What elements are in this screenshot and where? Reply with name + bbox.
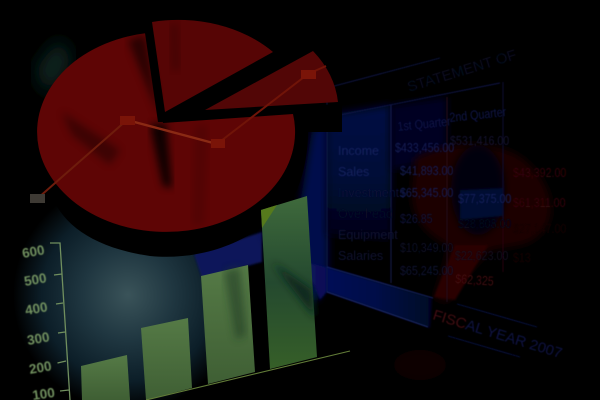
- row labels: [338, 144, 405, 263]
- red stripe: [434, 245, 488, 300]
- line markers: [30, 194, 45, 203]
- figures column 3: [513, 165, 567, 265]
- y axis: [50, 243, 70, 400]
- figures column 1: $41,893.00: [400, 163, 454, 178]
- bar 100: [81, 355, 130, 400]
- pie shadow: [50, 104, 342, 257]
- bar chart: [21, 196, 350, 400]
- red figure: [412, 145, 551, 302]
- row labels: Salaries: [338, 249, 383, 263]
- figures column 1: $26.85: [400, 211, 433, 226]
- quarter headers: 2nd Quarter: [449, 104, 507, 125]
- navy patch behind figure: [460, 188, 503, 220]
- pie chart: [30, 20, 342, 257]
- right slice: [205, 51, 338, 110]
- y axis labels: 400: [24, 299, 49, 318]
- line chart overlay: [30, 66, 326, 203]
- quarter headers: [397, 104, 507, 134]
- row labels: Sales: [338, 165, 369, 179]
- figures column 1: $433,456.00: [395, 140, 455, 155]
- row labels: Investments: [338, 186, 405, 200]
- row labels: Income: [338, 144, 379, 158]
- figures column 2: $531,416.00: [450, 133, 510, 148]
- dark hole in red figure: [451, 145, 505, 235]
- table navy cells: [391, 97, 447, 170]
- figures column 3: $61,311.00: [513, 195, 566, 210]
- figures column 1: $10,349.00: [400, 240, 454, 255]
- baseline: [146, 351, 350, 400]
- table title: STATEMENT OF: [405, 46, 519, 96]
- row labels: Overhead: [338, 207, 393, 221]
- blue backdrop: [194, 120, 328, 300]
- y axis labels: 300: [26, 329, 51, 348]
- teal streak top left: [35, 38, 72, 95]
- bar 400: [261, 196, 317, 369]
- y axis labels: 600: [21, 242, 46, 261]
- table lines: [327, 58, 537, 357]
- quarter headers: 1st Quarter: [397, 113, 451, 134]
- figures column 2: [450, 133, 512, 289]
- figures column 1: $65,345.00: [400, 185, 454, 200]
- figures column 3: $27,147.00: [513, 221, 567, 236]
- y axis labels: 200: [28, 358, 53, 377]
- row labels: Equipment: [338, 228, 398, 242]
- y axis labels: 500: [23, 270, 48, 289]
- dark rays on pie: [62, 24, 208, 225]
- table band: [303, 262, 432, 328]
- main pie slice: [37, 33, 295, 232]
- figures column 3: $43,392.00: [513, 165, 567, 180]
- panel: financial statement table: [303, 46, 567, 380]
- figures column 1: $65,245.00: [400, 263, 454, 278]
- figures column 2: $77,375.00: [458, 191, 512, 206]
- bar 200: [141, 318, 192, 400]
- top slice: [152, 20, 273, 112]
- footer: fiscal year: FISCAL YEAR 2007: [431, 307, 564, 362]
- table blue fill: [327, 105, 391, 240]
- figures column 1: [395, 140, 455, 278]
- y axis labels: [21, 242, 56, 400]
- lower red smudge: [394, 350, 446, 380]
- teal glow: [10, 180, 245, 400]
- figures column 2: $22,623.00: [455, 248, 509, 263]
- figures column 3: $13: [513, 250, 531, 265]
- figures column 2: $28,808.00: [458, 216, 512, 231]
- figures column 2: $62,325: [455, 271, 495, 289]
- bar 300: [201, 265, 255, 384]
